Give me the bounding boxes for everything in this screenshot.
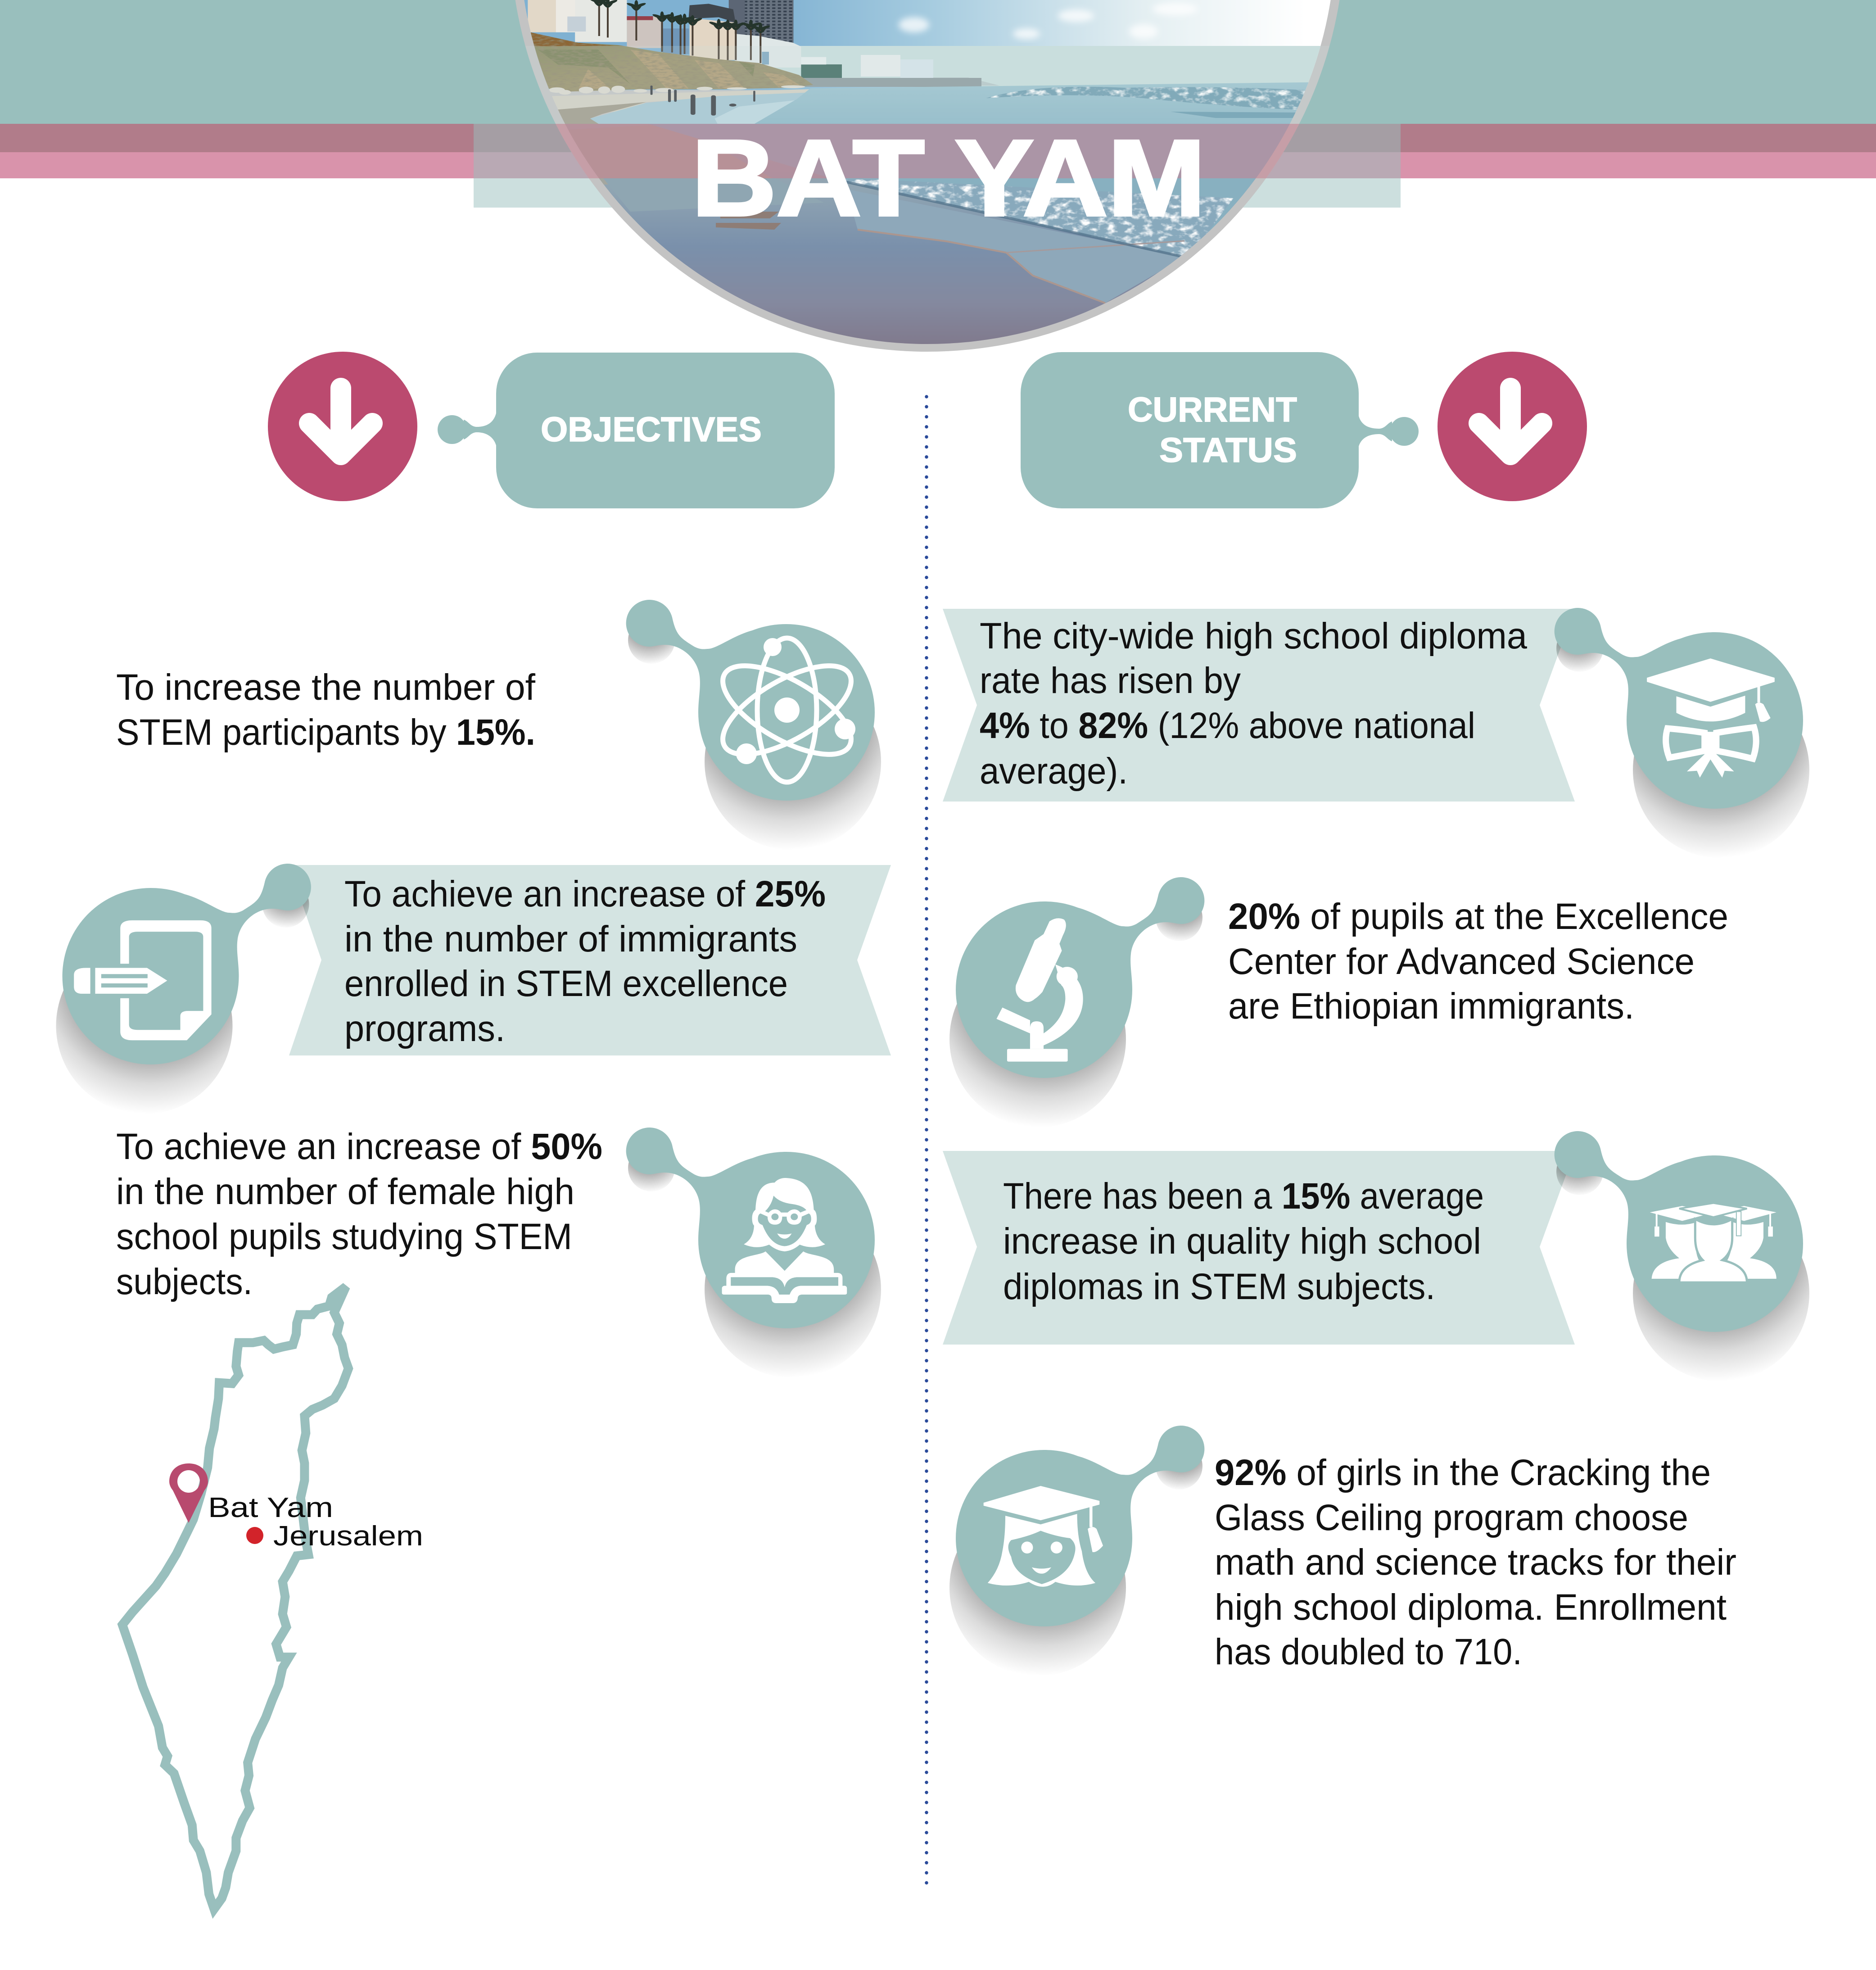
status 2 text: 20% of pupils at the Excellence [1228,896,1728,937]
wet sand and foreground sea [565,124,1256,344]
objectives label shape [438,353,835,508]
objective 2 text: programs. [344,1008,505,1049]
status 2 icon: microscope [949,877,1204,1128]
map of Israel with locations [122,1286,423,1909]
status 1 text: The city-wide high school diploma [980,616,1527,657]
icon: location pin [169,1463,208,1523]
town, cliff and beach in zoomed coordinates [528,0,833,126]
title: BAT YAM [692,118,1206,238]
status 1 text: rate has risen by [980,660,1241,701]
header bands [0,0,1876,208]
objectives text: OBJECTIVES [541,410,762,449]
status 2 text [1228,896,1728,1027]
status 1 text [980,616,1527,792]
heading: objectives [268,352,835,508]
objective 2 text: To achieve an increase of 25% [344,874,826,915]
objective 2 text [344,874,826,1049]
divider dotted line [925,397,928,1883]
current status text: STATUS [1159,431,1297,470]
status 4 text: high school diploma. Enrollment [1215,1587,1727,1628]
objective 2 text: enrolled in STEM excellence [344,963,788,1004]
status 3 ribbon [943,1151,1575,1345]
far town [801,55,999,87]
current status text: CURRENT [1128,390,1297,429]
objective 3 text: school pupils studying STEM [116,1216,572,1257]
status 4 icon: girl graduate [949,1426,1204,1676]
objective 3 icon: teacher with book [626,1128,881,1378]
status 1 icon: cap and diploma [1555,608,1809,858]
map outline [122,1286,348,1909]
current status text [1128,390,1297,470]
objective 1 text: STEM participants by 15%. [116,712,535,753]
status 3 text: There has been a 15% average [1003,1176,1484,1217]
status 3 text: increase in quality high school [1003,1221,1481,1262]
icon: down arrow circle [268,352,417,501]
status 4 text: math and science tracks for their [1215,1542,1736,1583]
objective 3 text: To achieve an increase of 50% [116,1126,602,1167]
status 3 icon: three graduates [1555,1131,1809,1381]
sea beyond town [755,82,1308,124]
status 1 ribbon [943,609,1575,802]
status 2 text: Center for Advanced Science [1228,941,1695,982]
objective 1 text [116,667,535,753]
status 4 text: 92% of girls in the Cracking the [1215,1452,1711,1493]
objective 2 icon: paper and pencil [56,864,311,1114]
label: Bat Yam: Bat Yam [208,1492,333,1523]
objective 2 ribbon [289,865,891,1055]
status 4 text: has doubled to 710. [1215,1631,1522,1672]
status 1 text: 4% to 82% (12% above national [980,705,1475,746]
objective 3 text: in the number of female high [116,1171,574,1212]
icon: down arrow circle [1438,352,1587,501]
status 4 text [1215,1452,1736,1672]
status 3 text [1003,1176,1484,1307]
marker: Jerusalem [246,1527,263,1544]
objective 1 text: To increase the number of [116,667,535,708]
status 4 text: Glass Ceiling program choose [1215,1497,1688,1538]
heading: current status [1021,352,1587,508]
status 1 text: average). [980,751,1128,792]
label: Jerusalem: Jerusalem [273,1521,423,1552]
photo: Bat Yam beach in circle [495,0,1373,352]
objective 1 icon: atom [626,600,881,850]
status 2 text: are Ethiopian immigrants. [1228,986,1634,1027]
objective 3 text [116,1126,602,1302]
objective 2 text: in the number of immigrants [344,919,797,960]
status 3 text: diplomas in STEM subjects. [1003,1266,1435,1307]
objective 3 text: subjects. [116,1261,253,1302]
current status label shape [1021,352,1419,508]
